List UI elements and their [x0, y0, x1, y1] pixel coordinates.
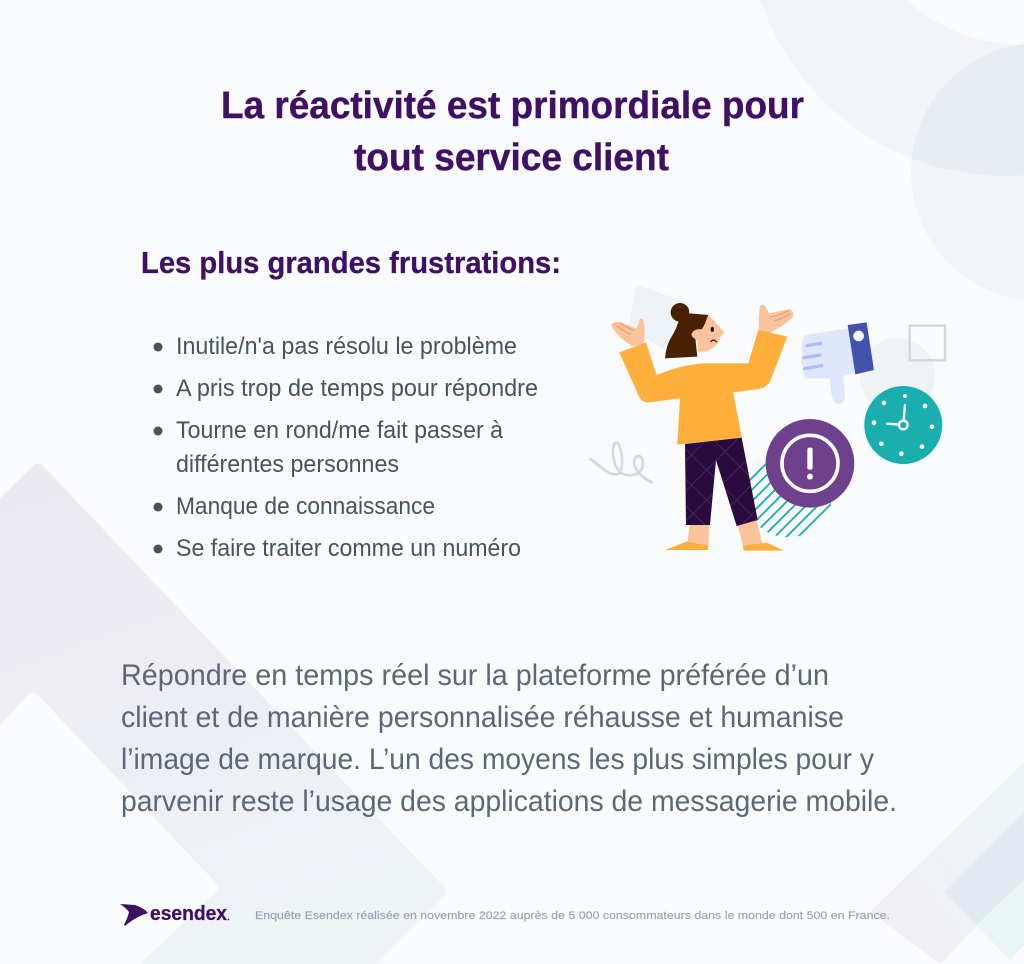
paragraph: parvenir reste l’usage des applications de messagerie mobile. — [121, 785, 897, 818]
eye — [711, 327, 714, 332]
paragraph: client et de manière personnalisée réhausse et humanise — [121, 701, 844, 734]
icon: thumbs down — [801, 322, 874, 404]
bullet list: Tourne en rond/me fait passer à — [176, 417, 504, 444]
hatched teal circle — [750, 459, 832, 538]
bullet list: Manque de connaissance — [176, 493, 435, 520]
face — [692, 315, 724, 352]
title: La réactivité est primordiale pour — [221, 85, 804, 127]
background shapes: bottom right diamonds — [870, 762, 1024, 964]
woman figure — [611, 303, 793, 551]
pants pattern — [685, 438, 758, 525]
paragraph: l’image de marque. L’un des moyens les plus simples pour y — [121, 743, 874, 776]
paragraph — [121, 659, 897, 818]
hair bun — [671, 303, 689, 322]
hair — [665, 313, 708, 358]
shoes — [665, 542, 784, 551]
title — [221, 85, 804, 179]
mouth — [711, 340, 717, 342]
legs — [687, 520, 763, 548]
icon: purple alert circle — [766, 419, 854, 508]
footnote: Enquête Esendex réalisée en novembre 2022 auprès de 5 000 consommateurs dans le monde dont 500 en France. — [255, 910, 890, 922]
right hand — [759, 305, 793, 333]
logo: esendex: esendex — [150, 903, 227, 925]
background shapes: top right circles — [912, 44, 1024, 176]
bullet list: Inutile/n'a pas résolu le problème — [176, 333, 517, 360]
left hand — [611, 319, 645, 346]
logo: esendex — [120, 903, 229, 926]
background shapes: bottom left diamonds — [0, 464, 446, 964]
decorative pale diamond behind head — [628, 285, 692, 349]
bullet list: différentes personnes — [176, 451, 399, 478]
bullet list: Se faire traiter comme un numéro — [176, 535, 521, 562]
bullet list: A pris trop de temps pour répondre — [176, 375, 538, 402]
sweater — [619, 330, 787, 445]
pants — [685, 438, 758, 526]
icon: empty square — [910, 326, 945, 360]
title: tout service client — [354, 137, 669, 179]
icon: clock — [864, 386, 942, 464]
illustration: frustrated woman with icons — [589, 285, 946, 551]
bullet list — [154, 333, 538, 562]
squiggle — [591, 442, 652, 482]
heading: frustrations: Les plus grandes frustrations: — [141, 245, 561, 280]
paragraph: Répondre en temps réel sur la plateforme préférée d’un — [121, 659, 829, 692]
pale circle behind clock — [860, 338, 935, 413]
